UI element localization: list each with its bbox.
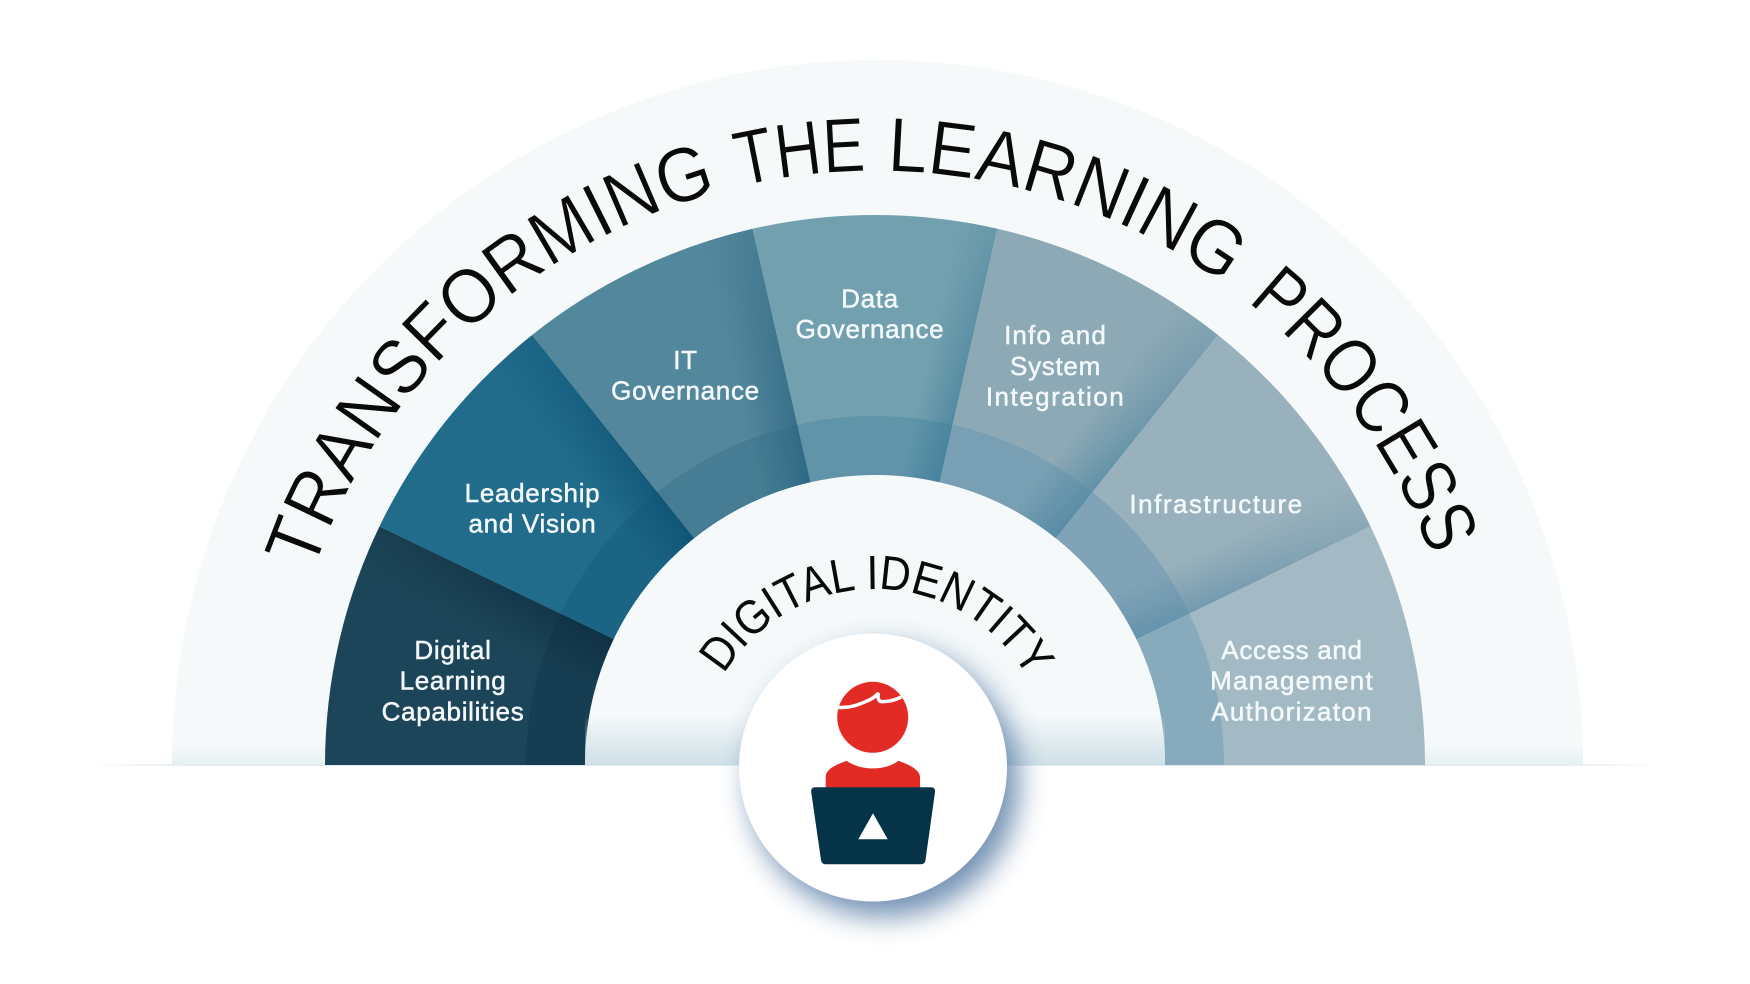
segment: Data Governance <box>753 215 997 482</box>
segment: Info and System Integration: Info and <box>1004 320 1107 350</box>
segment: Digital Learning Capabilities: Learning <box>400 666 506 696</box>
segment: IT Governance: IT <box>673 345 698 375</box>
subtitle: Digital Identity: DIGITAL IDENTITY <box>698 556 1056 672</box>
segment: Leadership and Vision: Leadership <box>465 478 600 508</box>
title: Transforming the Learning Process: PROCESS <box>1252 265 1475 550</box>
icon: person at laptop <box>811 682 935 864</box>
segment: Data Governance: Governance <box>796 314 944 344</box>
title: Transforming the Learning Process <box>264 118 1475 554</box>
segment: Digital Learning Capabilities <box>325 526 614 765</box>
segment: Digital Learning Capabilities: Digital <box>414 635 492 665</box>
segment: Infrastructure <box>1056 335 1370 639</box>
segment: Access and Management Authorization: Access and <box>1221 635 1363 665</box>
segment: Digital Learning Capabilities: Capabilities <box>382 696 524 726</box>
segment: Access and Management Authorization <box>1136 526 1425 765</box>
segment: Data Governance: Data <box>841 284 899 314</box>
title: Transforming the Learning Process: TRANSFORMING <box>264 147 710 554</box>
segment: Leadership and Vision: and Vision <box>469 508 596 538</box>
inner semicircle <box>585 475 1165 765</box>
horizon line <box>90 764 1660 766</box>
segment: Info and System Integration: System <box>1010 351 1101 381</box>
outer arch background <box>172 60 1583 765</box>
segment wheel <box>325 215 1425 765</box>
title: Transforming the Learning Process: LEARNING <box>893 118 1242 274</box>
segment: IT Governance <box>532 229 810 538</box>
segment: Access and Management Authorization: Management <box>1210 666 1374 696</box>
avatar circle with shadow <box>739 634 1019 917</box>
segment: Infrastructure: Infrastructure <box>1129 489 1304 519</box>
segment: Leadership and Vision <box>380 335 694 639</box>
segment: Info and System Integration: Integration <box>986 382 1125 412</box>
segment: Info and System Integration <box>940 229 1218 538</box>
segment: Access and Management Authorization: Authorizaton <box>1211 696 1373 726</box>
title: Transforming the Learning Process: THE <box>732 118 864 182</box>
segment: IT Governance: Governance <box>611 376 760 406</box>
